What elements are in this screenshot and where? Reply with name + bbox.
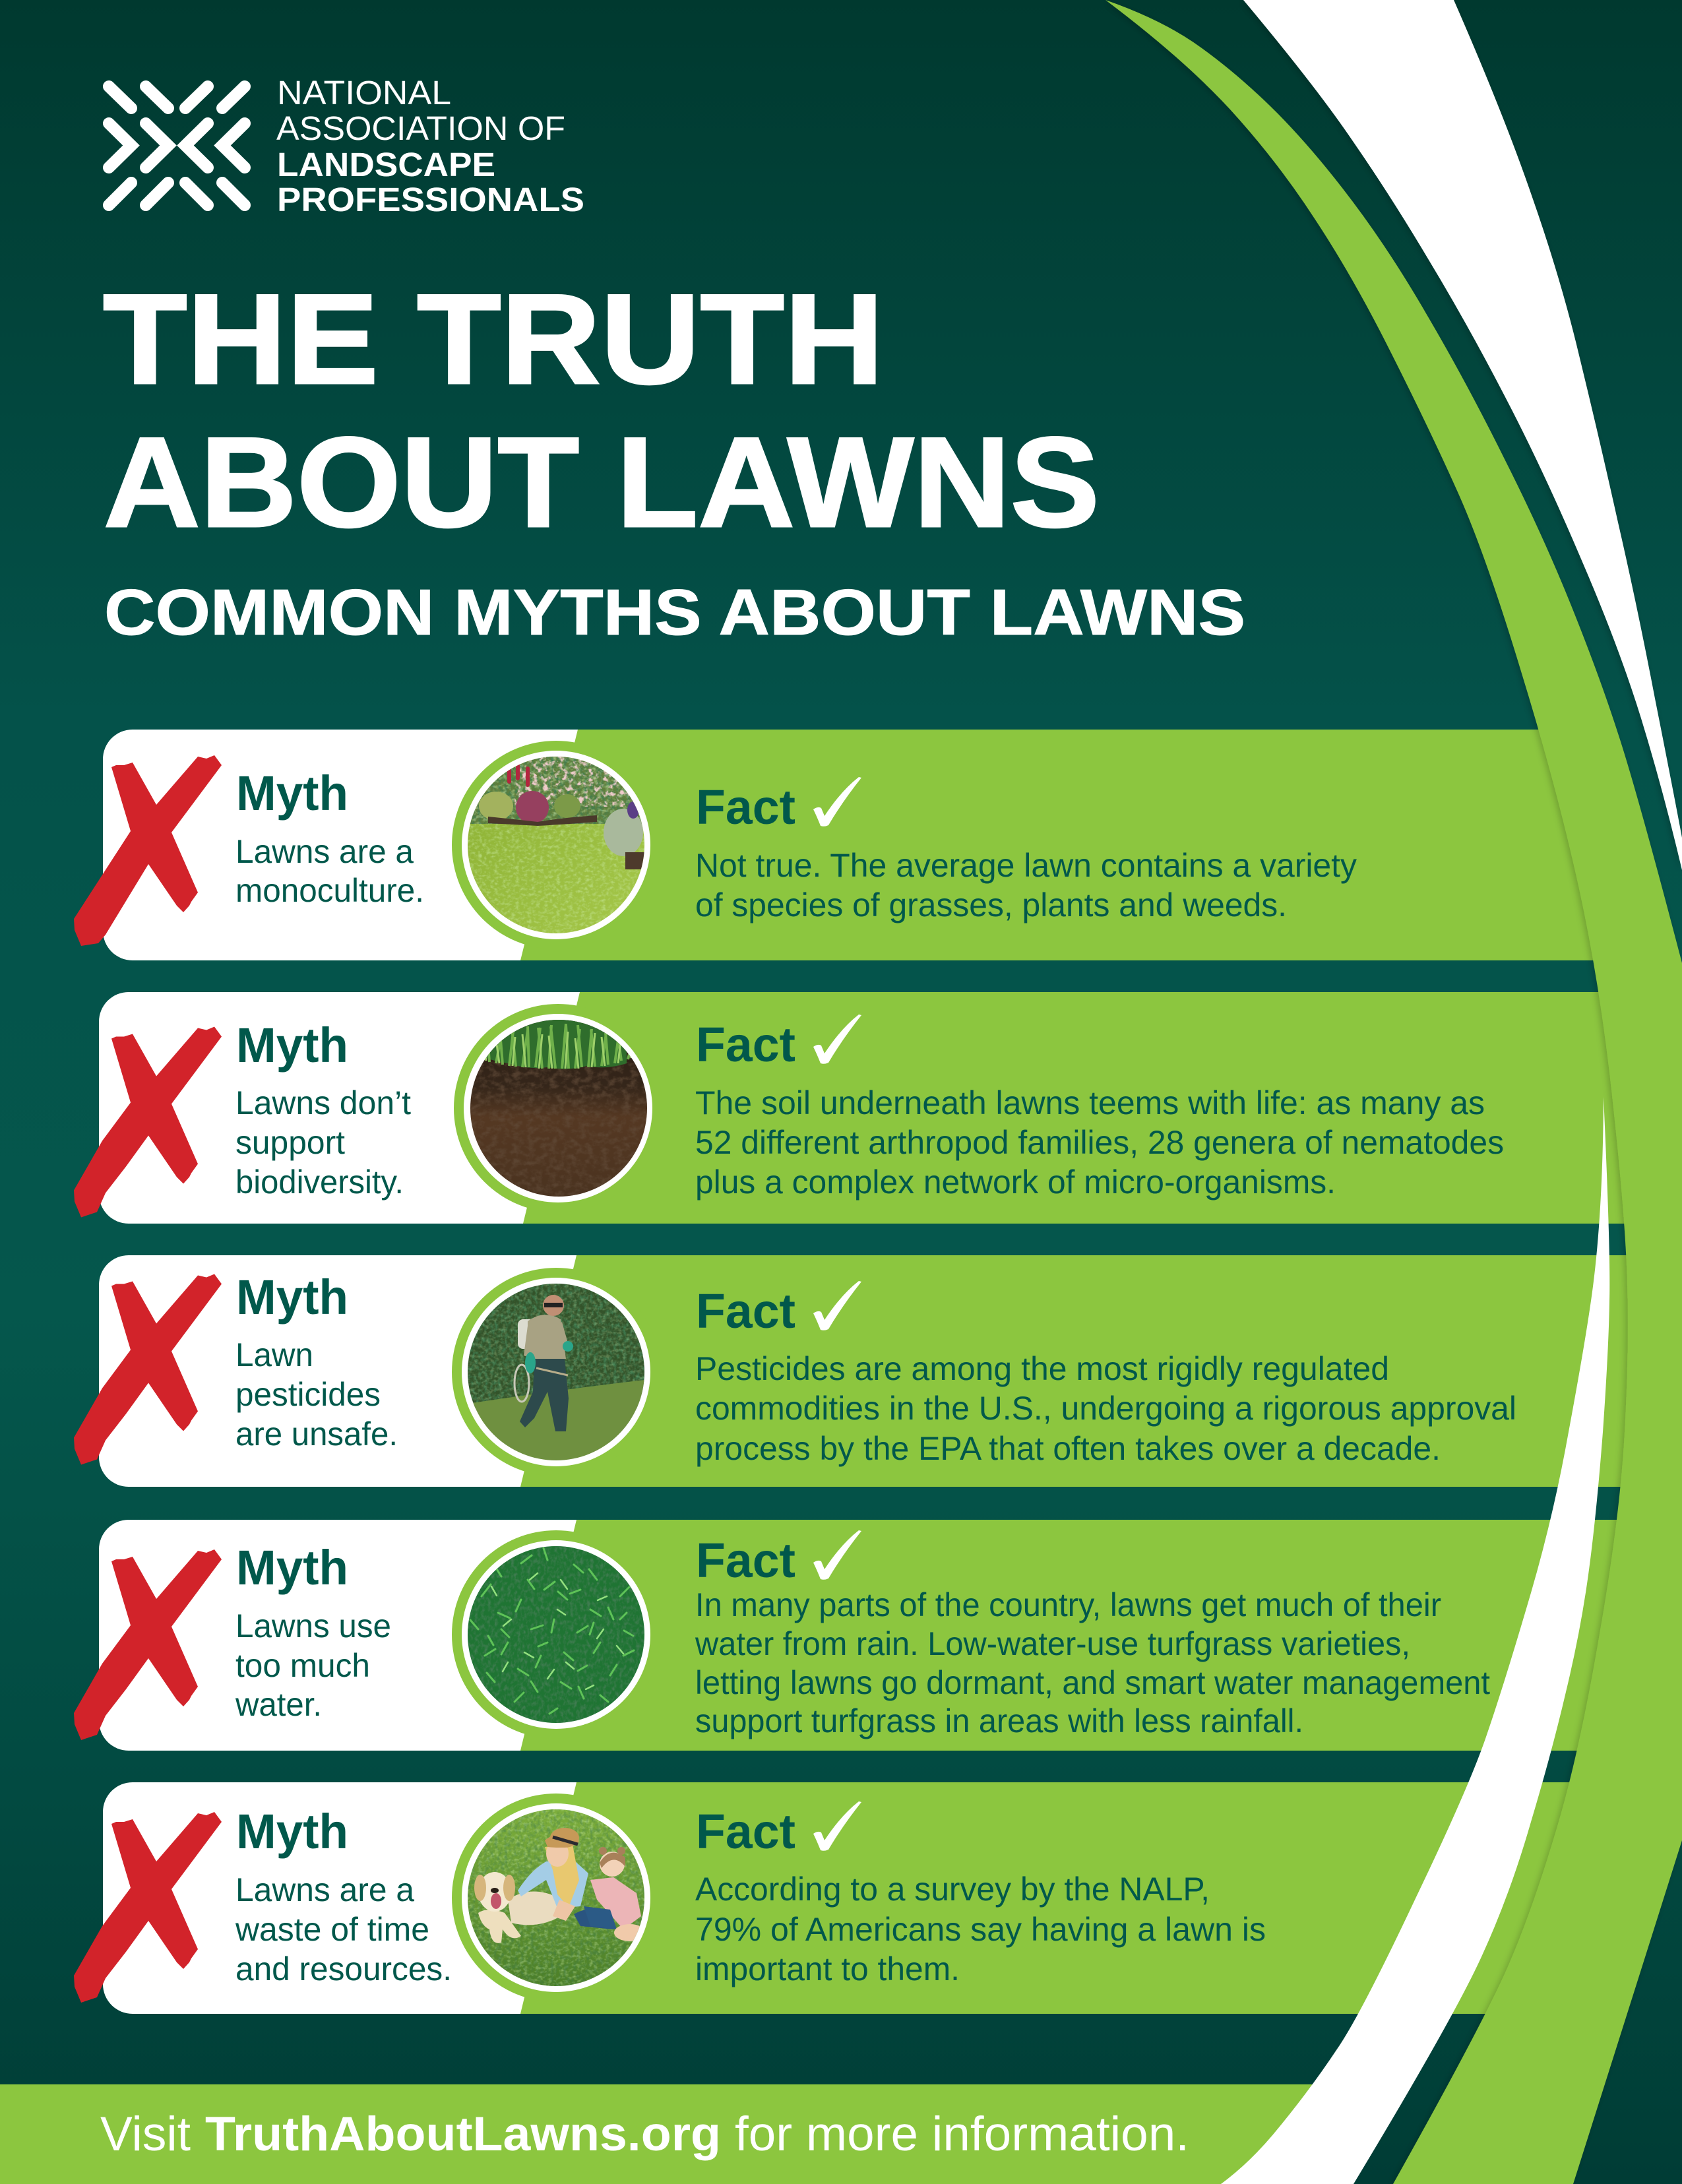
title: ABOUT LAWNS (104, 411, 1100, 554)
logo wordmark: LANDSCAPE (277, 146, 495, 183)
row 5 myth text: and resources. (235, 1950, 452, 1987)
row 3 myth text: pesticides (235, 1376, 381, 1413)
row 4 green fact panel (520, 1520, 1629, 1751)
row 1 fact text: of species of grasses, plants and weeds. (695, 887, 1287, 923)
row 2 check mark (813, 1014, 861, 1064)
row 2 fact text (695, 1017, 1504, 1201)
row 5 myth text: Lawns are a (235, 1871, 414, 1908)
row 1 myth text: Lawns are a (235, 833, 414, 870)
row 3 myth text: are unsafe. (235, 1416, 398, 1452)
green grass blade swoosh (1106, 0, 1682, 2184)
row 4 myth text (235, 1540, 391, 1723)
row 1 green fact panel (520, 730, 1603, 960)
row 2 fact text: 52 different arthropod families, 28 genera of nematodes (695, 1124, 1504, 1161)
row 1 myth text: monoculture. (235, 872, 424, 909)
logo wordmark: NATIONAL (277, 74, 451, 111)
row 4 myth text: Lawns use (235, 1607, 391, 1644)
row 4 myth text: too much (235, 1647, 370, 1684)
row 3 fact text: Fact (696, 1284, 795, 1338)
row 2 myth text: Lawns don’t (235, 1084, 411, 1121)
row 5 red X (74, 1812, 222, 2003)
row 2 fact text: plus a complex network of micro-organisms. (695, 1164, 1336, 1201)
row 1 photo: garden lawn (452, 741, 660, 949)
row 1 myth text (235, 766, 424, 909)
row 3 fact text (695, 1284, 1516, 1467)
footer text: TruthAboutLawns.org (205, 2107, 721, 2161)
row 4 fact text: In many parts of the country, lawns get much of their (695, 1586, 1441, 1623)
footer text (100, 2107, 1189, 2161)
row 1 myth text: Myth (236, 766, 348, 821)
row 4 photo: grass close-up (452, 1530, 660, 1739)
row 2 myth text: support (235, 1124, 345, 1161)
title (103, 268, 1100, 554)
row 3: myth and fact (74, 1255, 1629, 1487)
row 3 fact text: commodities in the U.S., undergoing a rigorous approval (695, 1390, 1516, 1427)
row 5 green fact panel (520, 1782, 1609, 2014)
row 5 fact text (695, 1804, 1266, 1987)
row 2: myth and fact (74, 992, 1629, 1224)
row 5 fact text: 79% of Americans say having a lawn is (695, 1911, 1266, 1948)
row 2 myth text: biodiversity. (235, 1164, 404, 1201)
row 2 green fact panel (523, 992, 1629, 1224)
lower white swoosh (1221, 1097, 1609, 2184)
row 4 fact text: support turfgrass in areas with less rainfall. (695, 1702, 1303, 1739)
logo wordmark: PROFESSIONALS (277, 181, 584, 218)
row 1 check mark (813, 777, 861, 827)
title: THE TRUTH (103, 268, 884, 411)
row 5 fact text: important to them. (695, 1950, 960, 1987)
row 4 myth text: water. (235, 1686, 322, 1723)
footer text: Visit (100, 2107, 191, 2161)
row 4 red X (74, 1549, 222, 1740)
row 3 red X (74, 1274, 222, 1464)
row 2 fact text: Fact (696, 1017, 795, 1072)
logo wordmark: ASSOCIATION OF (276, 109, 565, 147)
subtitle: COMMON MYTHS ABOUT LAWNS (104, 576, 1245, 648)
row 1: myth and fact (74, 730, 1603, 960)
row 1 fact text (695, 780, 1357, 923)
row 5 myth text: waste of time (235, 1911, 429, 1948)
row 1 fact text: Not true. The average lawn contains a variety (695, 847, 1357, 884)
row 4 fact text (695, 1533, 1490, 1739)
row 4 check mark (813, 1530, 861, 1580)
row 2 myth text (235, 1018, 411, 1201)
row 3 fact text: Pesticides are among the most rigidly regulated (695, 1350, 1389, 1387)
logo icon (109, 86, 245, 205)
row 2 photo: soil cross-section (454, 1004, 662, 1212)
row 3 fact text: process by the EPA that often takes over a decade. (695, 1430, 1441, 1467)
row 3 myth text: Lawn (235, 1336, 313, 1373)
row 4 myth text: Myth (236, 1540, 348, 1595)
row 5 photo: family and dog on lawn (452, 1794, 660, 2002)
row 5 fact text: According to a survey by the NALP, (695, 1871, 1210, 1908)
row 5 check mark (813, 1801, 861, 1851)
logo wordmark (276, 74, 584, 218)
row 4 fact text: water from rain. Low-water-use turfgrass varieties, (695, 1625, 1410, 1662)
row 3 myth text: Myth (236, 1270, 348, 1325)
row 5 fact text: Fact (696, 1804, 795, 1859)
row 2 fact text: The soil underneath lawns teems with life: as many as (695, 1084, 1485, 1121)
row 2 myth text: Myth (236, 1018, 348, 1073)
row 4 fact text: letting lawns go dormant, and smart water management (695, 1664, 1490, 1701)
upper white swoosh (1243, 0, 1682, 870)
footer text: for more information. (735, 2107, 1189, 2161)
row 3 photo: man spraying lawn (452, 1268, 660, 1476)
row 1 red X (74, 755, 222, 946)
row 3 check mark (813, 1281, 861, 1330)
row 3 green fact panel (520, 1255, 1629, 1487)
row 5 myth text: Myth (236, 1804, 348, 1859)
row 4: myth and fact (74, 1520, 1629, 1751)
row 5: myth and fact (74, 1782, 1609, 2014)
footer band (0, 2084, 1352, 2184)
row 5 myth text (235, 1804, 452, 1987)
row 2 red X (74, 1026, 222, 1218)
row 1 fact text: Fact (696, 780, 795, 834)
row 4 fact text: Fact (696, 1533, 795, 1588)
logo: National Association of Landscape Professionals (109, 74, 584, 218)
row 3 myth text (235, 1270, 398, 1452)
